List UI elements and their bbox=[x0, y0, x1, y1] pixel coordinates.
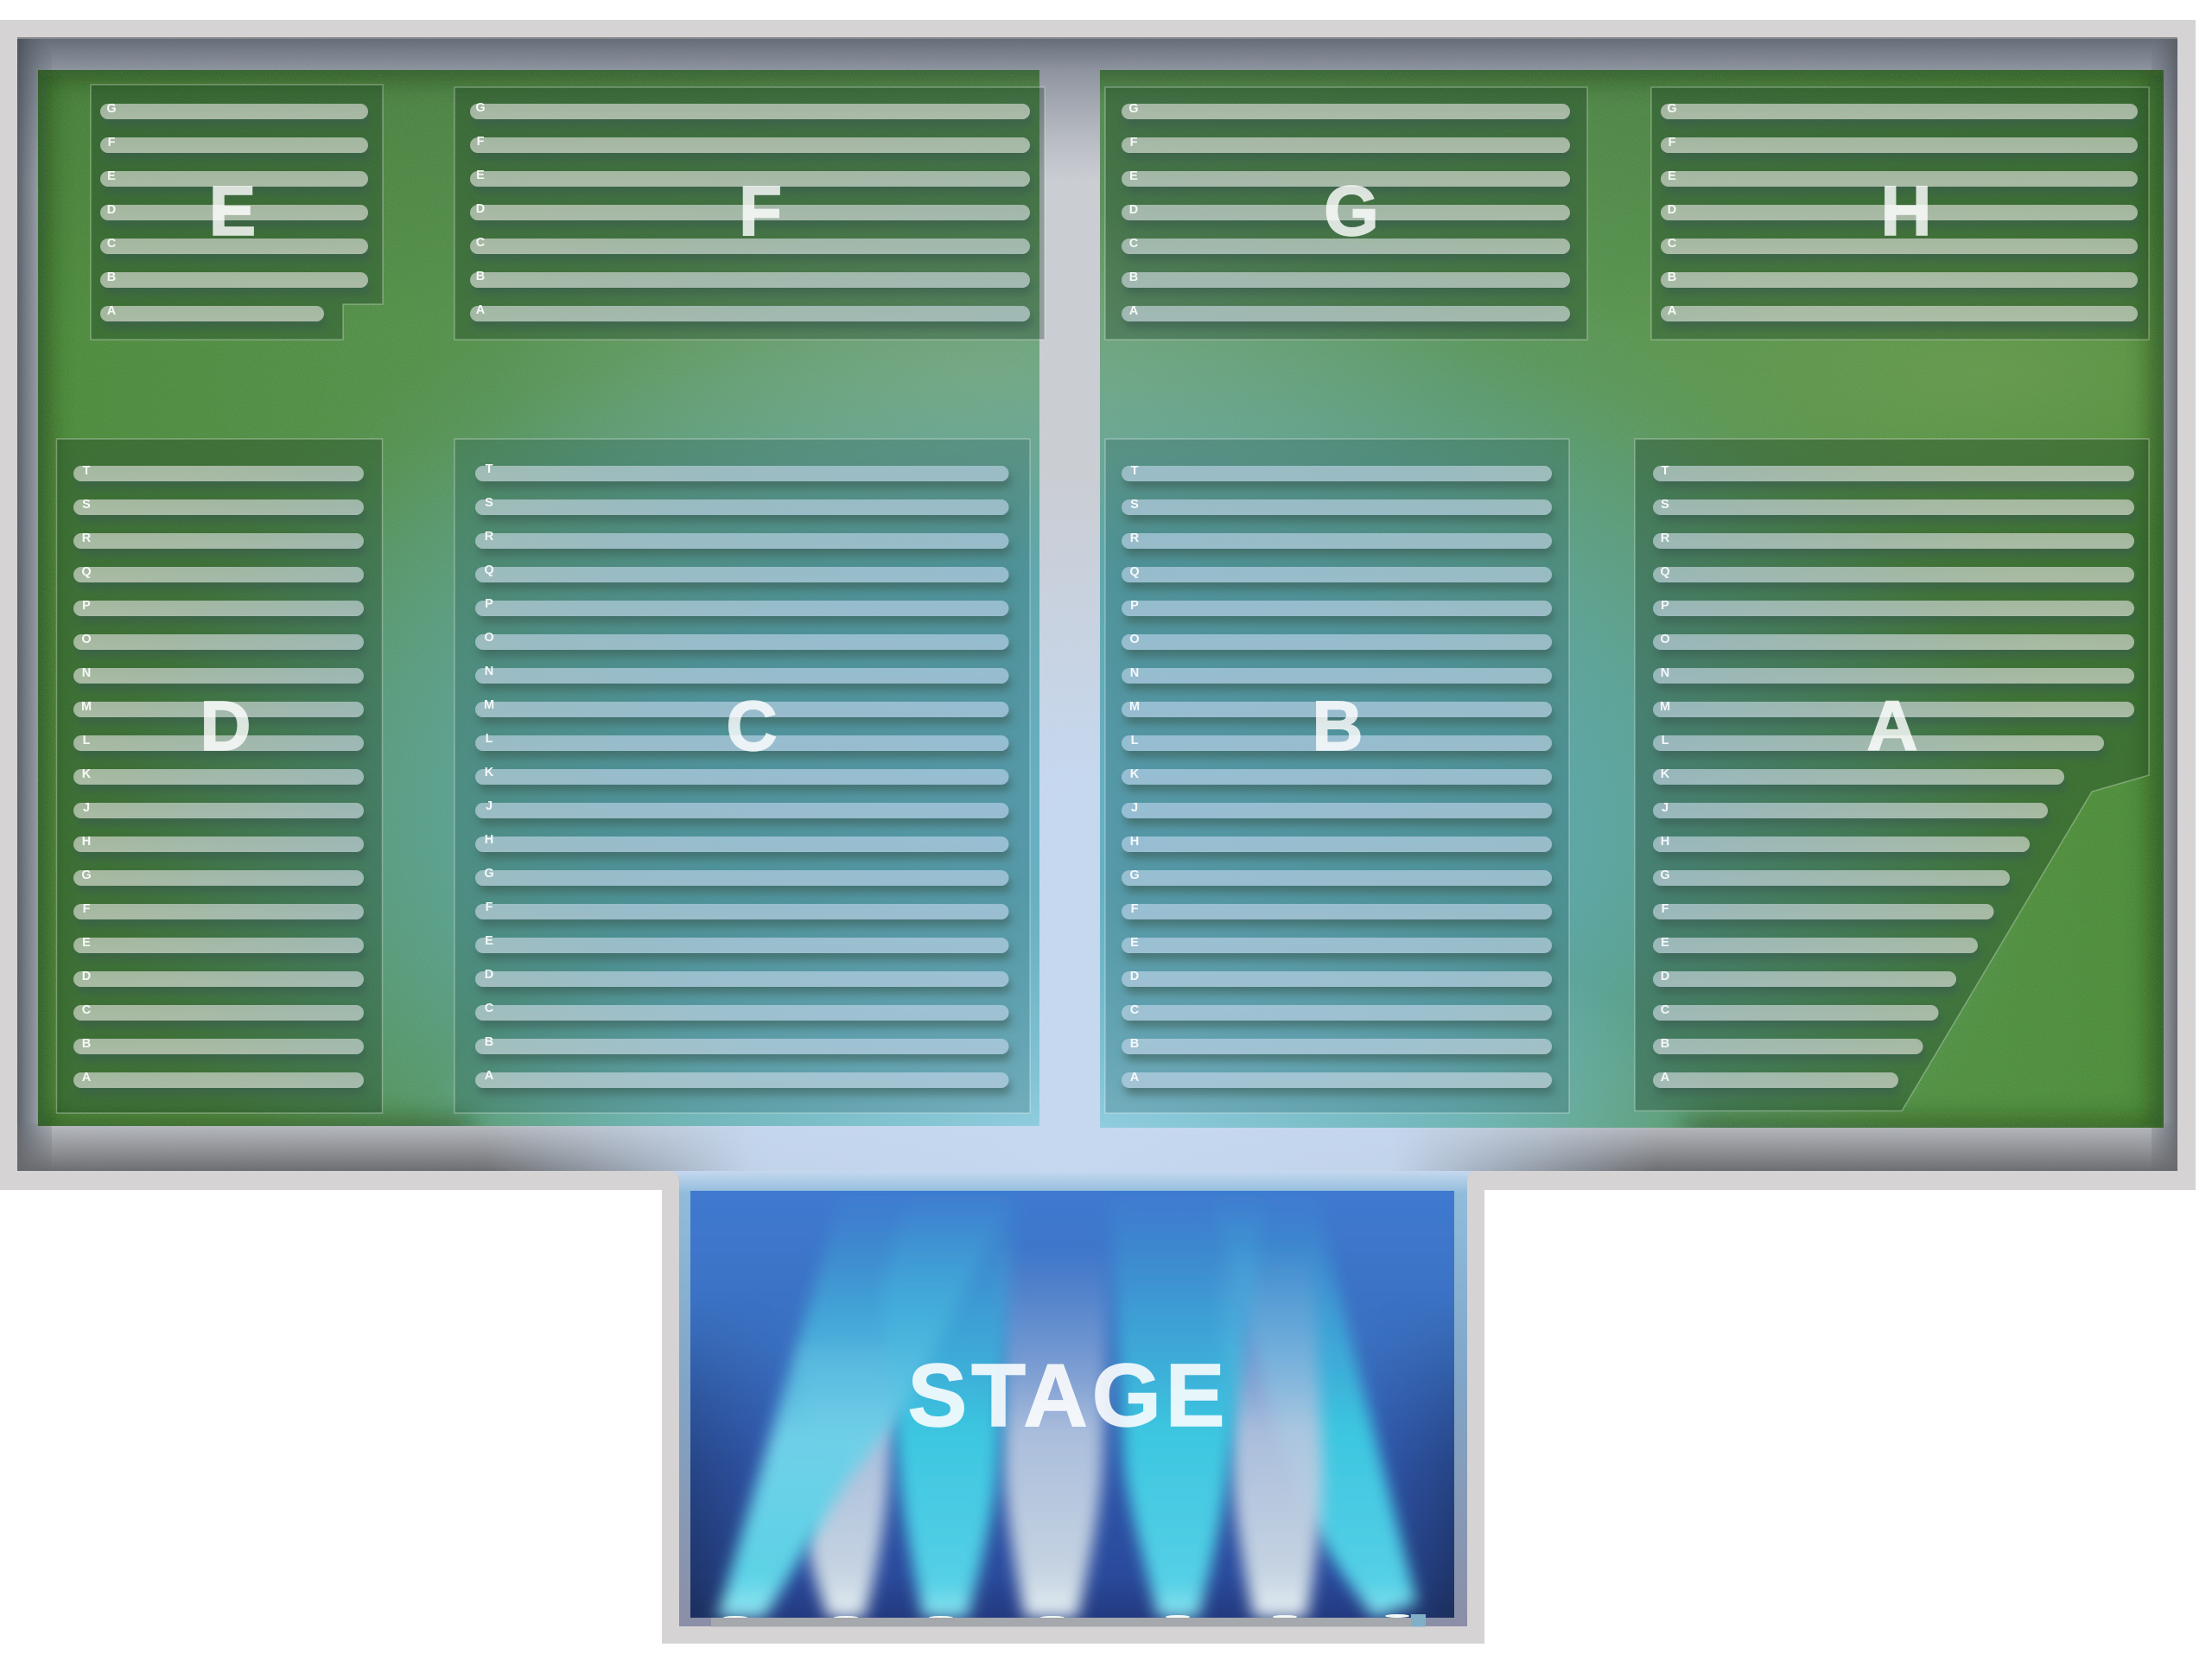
row S: S bbox=[1661, 498, 1669, 512]
section C rows bbox=[475, 462, 1009, 1088]
row B bbox=[1122, 270, 1570, 288]
white beam 6 bbox=[1217, 1253, 1323, 1618]
row G: G bbox=[1129, 868, 1140, 882]
row T bbox=[475, 462, 1009, 481]
row B: B bbox=[485, 1035, 493, 1049]
row C bbox=[475, 1002, 1009, 1021]
row G bbox=[1661, 102, 2138, 119]
section F letter: F bbox=[739, 172, 782, 251]
row R bbox=[475, 530, 1009, 549]
row J bbox=[73, 801, 364, 818]
row P: P bbox=[1130, 599, 1139, 613]
row H: H bbox=[1661, 835, 1669, 849]
row A: A bbox=[1129, 304, 1139, 318]
row N bbox=[1122, 666, 1552, 684]
row D bbox=[73, 970, 364, 987]
row K: K bbox=[82, 767, 92, 781]
row G bbox=[475, 867, 1009, 886]
row E bbox=[470, 169, 1030, 187]
row O: O bbox=[1129, 633, 1140, 646]
row A bbox=[475, 1069, 1009, 1088]
grass lawn bbox=[38, 70, 2164, 1128]
row C bbox=[1661, 237, 2138, 254]
row Q bbox=[1122, 565, 1552, 582]
stage light sources bbox=[723, 1614, 1409, 1619]
row F: F bbox=[1130, 136, 1138, 149]
row S: S bbox=[485, 496, 493, 510]
row H: H bbox=[82, 835, 91, 849]
row G bbox=[100, 102, 368, 119]
cyan beam 3 bbox=[881, 1191, 1015, 1618]
section C outline bbox=[454, 439, 1030, 1113]
row D: D bbox=[476, 202, 485, 216]
row T: T bbox=[1662, 464, 1669, 478]
section B letter: B bbox=[1312, 687, 1363, 766]
section A bbox=[1635, 439, 2149, 1111]
row S bbox=[1122, 498, 1552, 515]
row M bbox=[1653, 700, 2134, 717]
row B: B bbox=[1130, 1037, 1139, 1051]
row F bbox=[1122, 902, 1552, 919]
row L: L bbox=[1662, 734, 1669, 747]
row H bbox=[73, 835, 364, 852]
row B bbox=[73, 1037, 364, 1054]
row E: E bbox=[476, 169, 485, 182]
cyan beam 5 bbox=[1110, 1191, 1266, 1618]
row R: R bbox=[1661, 531, 1670, 545]
row S bbox=[1653, 498, 2134, 515]
row C bbox=[100, 237, 368, 254]
row G bbox=[1653, 868, 2010, 886]
row K: K bbox=[1130, 767, 1140, 781]
section H outline bbox=[1651, 87, 2149, 340]
row D bbox=[1122, 203, 1570, 220]
row E bbox=[1122, 169, 1570, 187]
row F: F bbox=[1131, 902, 1139, 916]
row F bbox=[1661, 136, 2138, 153]
row Q: Q bbox=[81, 565, 92, 579]
row H: H bbox=[485, 833, 493, 847]
row O bbox=[1653, 633, 2134, 650]
row O bbox=[475, 631, 1009, 650]
row D bbox=[1122, 970, 1552, 987]
row G bbox=[1122, 868, 1552, 886]
row C: C bbox=[1661, 1003, 1670, 1017]
row E: E bbox=[82, 936, 91, 950]
row C bbox=[470, 236, 1030, 254]
row M bbox=[73, 700, 364, 717]
section A outline bbox=[1635, 439, 2149, 1111]
row L bbox=[1653, 734, 2104, 751]
row F bbox=[1653, 902, 1994, 919]
row F: F bbox=[477, 135, 485, 149]
row D: D bbox=[1129, 203, 1138, 217]
section A rows bbox=[1653, 464, 2134, 1088]
row Q bbox=[1653, 565, 2134, 582]
row G: G bbox=[1667, 102, 1677, 116]
row D: D bbox=[1668, 203, 1676, 217]
row R bbox=[1122, 531, 1552, 549]
row R: R bbox=[485, 530, 494, 544]
row G: G bbox=[106, 102, 117, 116]
row F bbox=[1122, 136, 1570, 153]
row D: D bbox=[1661, 970, 1669, 983]
row N: N bbox=[1130, 666, 1139, 680]
row M: M bbox=[81, 700, 92, 714]
row B: B bbox=[1129, 270, 1138, 284]
row C: C bbox=[107, 237, 117, 251]
cyan beam 1 bbox=[717, 1191, 1015, 1618]
row E: E bbox=[485, 934, 493, 948]
row B bbox=[470, 270, 1030, 288]
row N bbox=[1653, 666, 2134, 684]
row A bbox=[470, 303, 1030, 321]
row O: O bbox=[81, 633, 92, 646]
section B rows bbox=[1122, 464, 1552, 1088]
row H: H bbox=[1130, 835, 1139, 849]
row S bbox=[73, 498, 364, 515]
row K: K bbox=[485, 766, 494, 779]
row T: T bbox=[1131, 464, 1139, 478]
section C letter: C bbox=[726, 687, 778, 766]
row R bbox=[73, 531, 364, 549]
section B outline bbox=[1105, 439, 1569, 1113]
row A bbox=[1661, 304, 2138, 321]
row C bbox=[1122, 237, 1570, 254]
stage backdrop bbox=[690, 1191, 1454, 1619]
row G: G bbox=[1660, 868, 1670, 882]
row O bbox=[73, 633, 364, 650]
row J: J bbox=[1131, 801, 1138, 815]
section D letter: D bbox=[200, 687, 251, 766]
row D: D bbox=[1130, 970, 1139, 983]
row A: A bbox=[1661, 1071, 1670, 1085]
row D: D bbox=[485, 968, 493, 982]
row A bbox=[1122, 1071, 1552, 1088]
row C: C bbox=[485, 1002, 494, 1015]
row E: E bbox=[1130, 936, 1139, 950]
row N bbox=[475, 665, 1009, 684]
row K bbox=[1653, 767, 2064, 785]
row F bbox=[73, 902, 364, 919]
row O: O bbox=[484, 631, 494, 645]
row E bbox=[1653, 936, 1978, 953]
row O bbox=[1122, 633, 1552, 650]
section H letter: H bbox=[1880, 172, 1932, 251]
row G bbox=[73, 868, 364, 886]
row F: F bbox=[1662, 902, 1669, 916]
stage lip end bbox=[1411, 1614, 1426, 1626]
row L bbox=[1122, 734, 1552, 751]
row P bbox=[73, 599, 364, 616]
row T bbox=[1653, 464, 2134, 481]
row E: E bbox=[107, 169, 116, 183]
row H bbox=[1653, 835, 2030, 852]
row E bbox=[1661, 169, 2138, 187]
stage front lip bbox=[711, 1618, 1411, 1626]
row B bbox=[1653, 1037, 1923, 1054]
row D bbox=[475, 968, 1009, 987]
row T bbox=[1122, 464, 1552, 481]
row C: C bbox=[1129, 237, 1139, 251]
row C: C bbox=[1668, 237, 1677, 251]
row B: B bbox=[82, 1037, 91, 1051]
row P: P bbox=[1661, 599, 1669, 613]
white beam 4 bbox=[1002, 1244, 1110, 1618]
row L: L bbox=[486, 732, 493, 746]
row B: B bbox=[107, 270, 116, 284]
row D bbox=[1661, 203, 2138, 220]
row E: E bbox=[1129, 169, 1138, 183]
row P: P bbox=[82, 599, 91, 613]
row G: G bbox=[81, 868, 92, 882]
row J bbox=[1653, 801, 2048, 818]
section D bbox=[57, 439, 382, 1113]
row B: B bbox=[1668, 270, 1676, 284]
row B bbox=[475, 1035, 1009, 1054]
row F bbox=[475, 900, 1009, 919]
row J: J bbox=[83, 801, 90, 815]
section C bbox=[454, 439, 1030, 1113]
row L: L bbox=[83, 734, 91, 747]
section E rows bbox=[100, 102, 368, 321]
stage light beams bbox=[717, 1191, 1417, 1618]
row F: F bbox=[83, 902, 91, 916]
row M: M bbox=[484, 698, 494, 712]
section G rows bbox=[1122, 102, 1570, 321]
row C bbox=[1122, 1003, 1552, 1021]
row A bbox=[73, 1071, 364, 1088]
row T: T bbox=[83, 464, 91, 478]
row R: R bbox=[82, 531, 92, 545]
section H bbox=[1651, 87, 2149, 340]
section G bbox=[1105, 87, 1587, 340]
stage bbox=[690, 1191, 1454, 1626]
row A: A bbox=[107, 304, 117, 318]
cyan beam 7 bbox=[1210, 1191, 1417, 1618]
row K: K bbox=[1661, 767, 1670, 781]
row B: B bbox=[1661, 1037, 1669, 1051]
row B bbox=[1122, 1037, 1552, 1054]
section F rows bbox=[470, 101, 1030, 321]
row D: D bbox=[107, 203, 116, 217]
row S: S bbox=[1130, 498, 1139, 512]
row D bbox=[1653, 970, 1956, 987]
row F: F bbox=[1669, 136, 1676, 149]
section G letter: G bbox=[1324, 172, 1379, 251]
row J bbox=[475, 799, 1009, 818]
row H bbox=[475, 833, 1009, 852]
row O: O bbox=[1660, 633, 1670, 646]
row M bbox=[475, 698, 1009, 717]
row G: G bbox=[484, 867, 494, 881]
stage title: STAGE bbox=[907, 1345, 1225, 1445]
section E outline bbox=[91, 85, 383, 340]
row P bbox=[1122, 599, 1552, 616]
row A: A bbox=[82, 1071, 92, 1085]
row R bbox=[1653, 531, 2134, 549]
row A bbox=[1122, 304, 1570, 321]
row L: L bbox=[1131, 734, 1139, 747]
row S: S bbox=[82, 498, 91, 512]
row F bbox=[470, 135, 1030, 153]
row T bbox=[73, 464, 364, 481]
row D: D bbox=[82, 970, 91, 983]
row N: N bbox=[485, 665, 493, 678]
row G: G bbox=[475, 101, 486, 115]
section F bbox=[454, 87, 1045, 340]
row C: C bbox=[1130, 1003, 1140, 1017]
row E bbox=[1122, 936, 1552, 953]
row Q bbox=[475, 563, 1009, 582]
row J: J bbox=[1662, 801, 1669, 815]
section E bbox=[91, 85, 383, 340]
row E bbox=[475, 934, 1009, 953]
row D bbox=[470, 202, 1030, 220]
row G bbox=[1122, 102, 1570, 119]
row N: N bbox=[1661, 666, 1669, 680]
section D rows bbox=[73, 464, 364, 1088]
row Q: Q bbox=[1660, 565, 1670, 579]
row N bbox=[73, 666, 364, 684]
row T: T bbox=[486, 462, 493, 476]
row P: P bbox=[485, 597, 493, 611]
section A letter: A bbox=[1866, 687, 1918, 766]
row M: M bbox=[1129, 700, 1140, 714]
row P bbox=[1653, 599, 2134, 616]
row E bbox=[73, 936, 364, 953]
row Q: Q bbox=[1129, 565, 1140, 579]
row A: A bbox=[476, 303, 486, 317]
row N: N bbox=[82, 666, 91, 680]
row A bbox=[1653, 1071, 1898, 1088]
row L bbox=[475, 732, 1009, 751]
section F outline bbox=[454, 87, 1045, 340]
row F bbox=[100, 136, 368, 153]
section B bbox=[1105, 439, 1569, 1113]
row C: C bbox=[476, 236, 486, 250]
row E: E bbox=[1661, 936, 1669, 950]
row K bbox=[1122, 767, 1552, 785]
row A: A bbox=[485, 1069, 494, 1083]
row B bbox=[100, 270, 368, 288]
row E bbox=[100, 169, 368, 187]
row A: A bbox=[1130, 1071, 1140, 1085]
row Q bbox=[73, 565, 364, 582]
row G bbox=[470, 101, 1030, 119]
row M bbox=[1122, 700, 1552, 717]
row F: F bbox=[108, 136, 116, 149]
row C: C bbox=[82, 1003, 92, 1017]
row A: A bbox=[1668, 304, 1677, 318]
section G outline bbox=[1105, 87, 1587, 340]
row R: R bbox=[1130, 531, 1140, 545]
row Q: Q bbox=[484, 563, 494, 577]
row B bbox=[1661, 270, 2138, 288]
row K bbox=[73, 767, 364, 785]
row J bbox=[1122, 801, 1552, 818]
row D bbox=[100, 203, 368, 220]
row E: E bbox=[1668, 169, 1676, 183]
row J: J bbox=[486, 799, 493, 813]
row M: M bbox=[1660, 700, 1670, 714]
section D outline bbox=[57, 439, 382, 1113]
row B: B bbox=[476, 270, 485, 283]
white beam 2 bbox=[800, 1414, 899, 1618]
row C bbox=[73, 1003, 364, 1021]
row S bbox=[475, 496, 1009, 515]
row P bbox=[475, 597, 1009, 616]
row K bbox=[475, 766, 1009, 785]
row A bbox=[100, 304, 324, 321]
row F: F bbox=[486, 900, 493, 914]
row G: G bbox=[1128, 102, 1139, 116]
section H rows bbox=[1661, 102, 2138, 321]
row C bbox=[1653, 1003, 1939, 1021]
row L bbox=[73, 734, 364, 751]
row H bbox=[1122, 835, 1552, 852]
section E letter: E bbox=[209, 172, 256, 251]
